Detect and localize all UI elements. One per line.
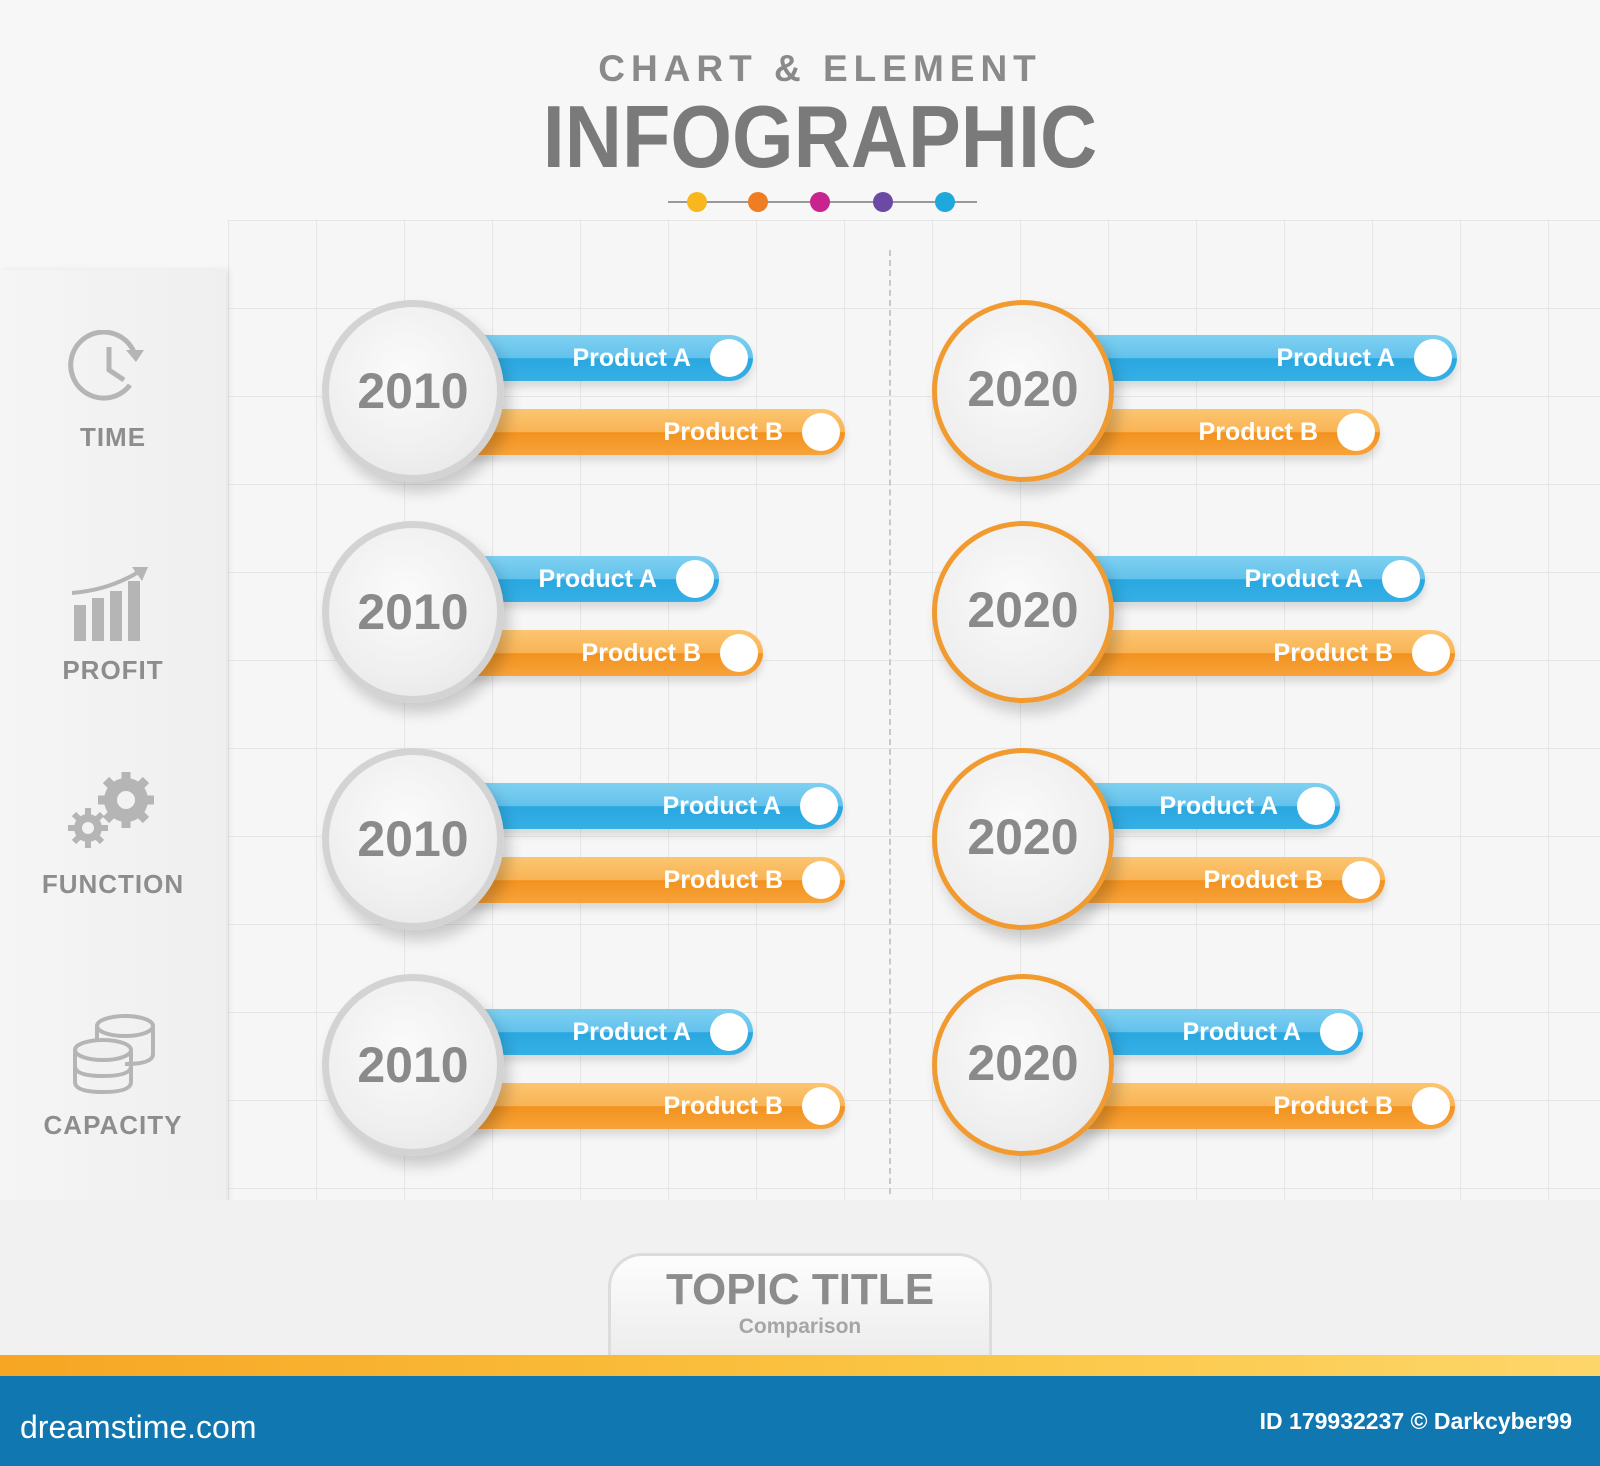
text: Product A bbox=[1276, 344, 1395, 372]
footer id: ID 179932237 © Darkcyber99 bbox=[1260, 1408, 1572, 1434]
grid background bbox=[228, 220, 1600, 1200]
text: Product A bbox=[1159, 792, 1278, 820]
text: Product B bbox=[1199, 418, 1318, 446]
text: Product B bbox=[1274, 639, 1393, 667]
text: 2020 bbox=[967, 809, 1079, 865]
row 1 left bbox=[322, 300, 847, 498]
footer logo: dreamstime.com bbox=[20, 1409, 256, 1445]
text: Product A bbox=[538, 565, 657, 593]
icon: function gears bbox=[68, 772, 154, 848]
orange strip bbox=[0, 1355, 1600, 1376]
text: 2010 bbox=[357, 363, 469, 419]
row 4 left bbox=[322, 974, 847, 1172]
text: 2010 bbox=[357, 811, 469, 867]
row 1 right bbox=[932, 300, 1459, 498]
label: function: FUNCTION bbox=[42, 869, 184, 899]
text: Product B bbox=[1204, 866, 1323, 894]
icon: capacity coins bbox=[73, 1014, 155, 1094]
text: 2020 bbox=[967, 361, 1079, 417]
text: Product A bbox=[1244, 565, 1363, 593]
row 3 right bbox=[932, 748, 1387, 946]
text: 2020 bbox=[967, 582, 1079, 638]
icon: profit bbox=[72, 567, 148, 641]
text: Product A bbox=[572, 344, 691, 372]
label: profit: PROFIT bbox=[62, 655, 164, 685]
title: infographic: INFOGRAPHIC bbox=[543, 87, 1097, 186]
row 2 right bbox=[932, 521, 1457, 718]
row 3 left bbox=[322, 748, 847, 946]
sidebar panel bbox=[0, 270, 226, 1210]
text: Product A bbox=[1182, 1018, 1301, 1046]
bottom bg bbox=[0, 1200, 1600, 1356]
text: Product A bbox=[662, 792, 781, 820]
footer band bbox=[0, 1376, 1600, 1466]
title: chart & element: CHART & ELEMENT bbox=[598, 48, 1042, 89]
text: Product B bbox=[664, 418, 783, 446]
label: time: TIME bbox=[80, 422, 146, 452]
text: 2020 bbox=[967, 1035, 1079, 1091]
row 4 right bbox=[932, 974, 1457, 1172]
text: Product B bbox=[664, 866, 783, 894]
colored dots line bbox=[668, 192, 977, 212]
row 2 left bbox=[322, 521, 765, 718]
subtitle: Comparison bbox=[739, 1315, 861, 1338]
label: capacity: CAPACITY bbox=[44, 1110, 182, 1140]
text: 2010 bbox=[357, 1037, 469, 1093]
text: Product B bbox=[1274, 1092, 1393, 1120]
text: Product B bbox=[664, 1092, 783, 1120]
text: Product A bbox=[572, 1018, 691, 1046]
topic title box bbox=[608, 1253, 992, 1357]
dashed divider bbox=[889, 250, 891, 1194]
text: 2010 bbox=[357, 584, 469, 640]
text: Product B bbox=[582, 639, 701, 667]
topic title text: TOPIC TITLE bbox=[666, 1265, 934, 1314]
icon: time bbox=[68, 330, 144, 401]
